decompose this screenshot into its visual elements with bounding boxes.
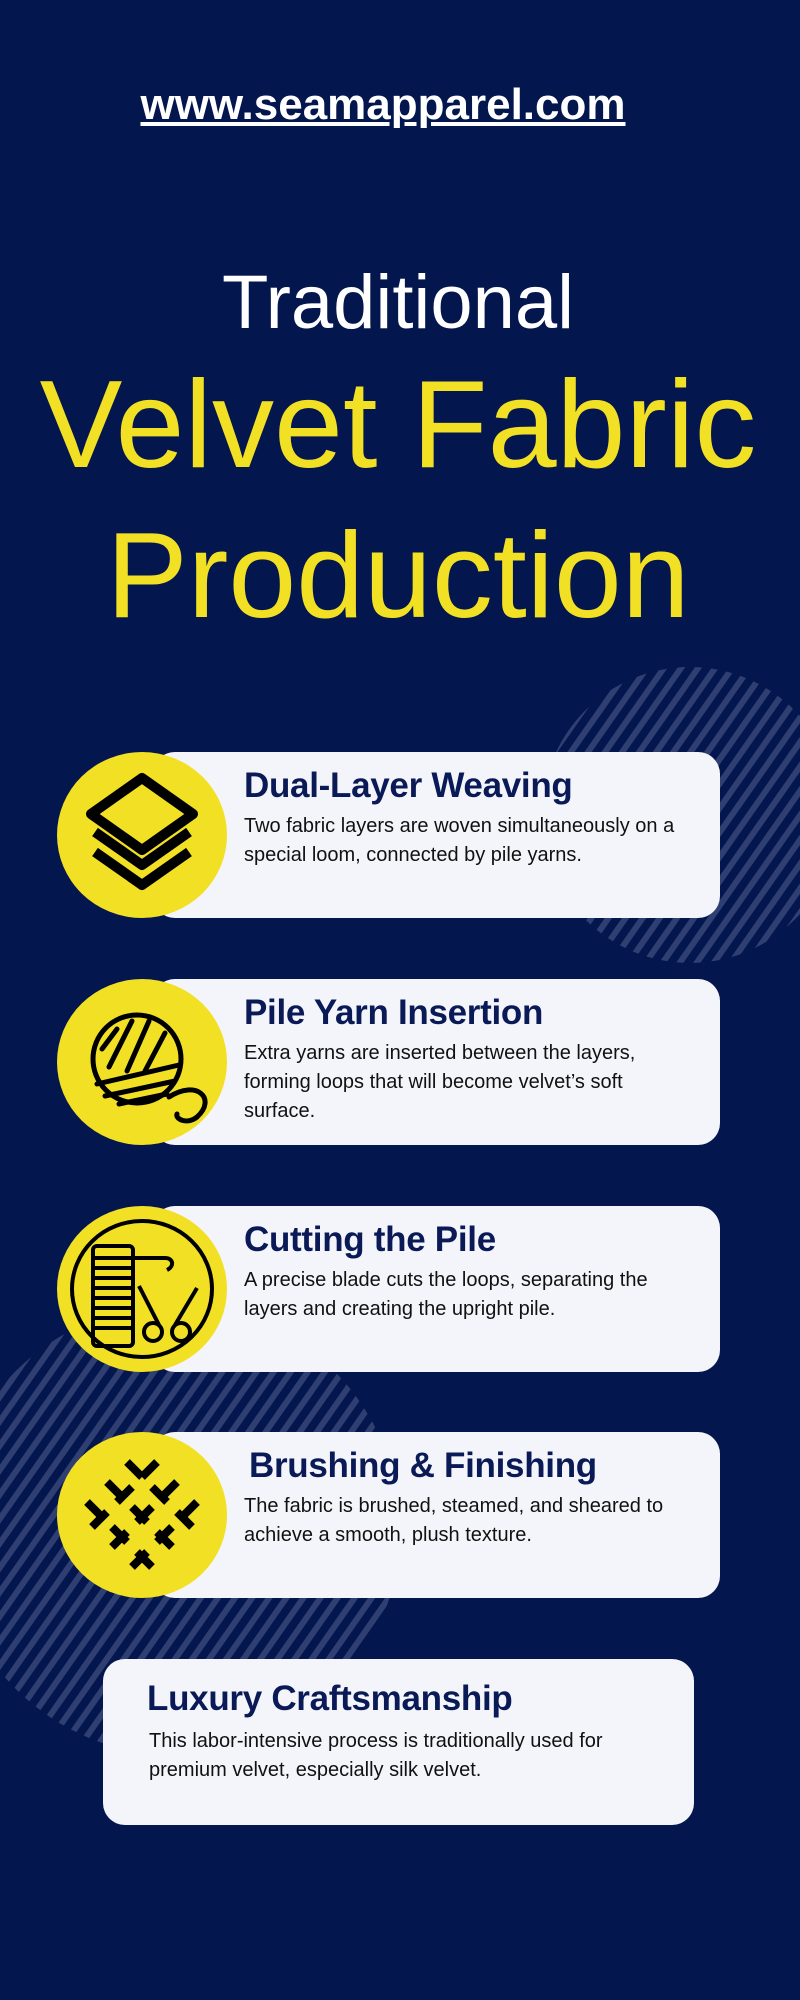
icon: woven pattern [57,1432,227,1598]
text: The fabric is brushed, steamed, and sheared to achieve a smooth, plush texture. [244,1495,663,1546]
panel: pile yarn insertion [57,979,720,1145]
title: Traditional [222,260,574,345]
text: Two fabric layers are woven simultaneously on a special loom, connected by pile yarns. [244,815,674,866]
panel: cutting the pile [57,1206,720,1372]
icon: yarn ball [57,979,227,1145]
heading: Luxury Craftsmanship [147,1679,512,1718]
heading: Cutting the Pile [244,1220,496,1259]
icon: layers [57,752,227,918]
text: Extra yarns are inserted between the layers, forming loops that will become velvet’s soft surface. [244,1042,635,1122]
heading: Dual-Layer Weaving [244,766,573,805]
text: This labor-intensive process is traditionally used for premium velvet, especially silk velvet. [149,1730,603,1781]
heading: Pile Yarn Insertion [244,993,543,1032]
text: A precise blade cuts the loops, separating the layers and creating the upright pile. [244,1269,648,1320]
panel: luxury craftsmanship [103,1659,694,1825]
title: Velvet Fabric [40,356,756,494]
title [40,260,756,643]
url: www.seamapparel.com [140,80,626,129]
panel: brushing & finishing [57,1432,720,1598]
panel: dual-layer weaving [57,752,720,918]
title: Production [106,507,690,643]
heading: Brushing & Finishing [249,1446,597,1485]
icon: thread and scissors [57,1206,227,1372]
